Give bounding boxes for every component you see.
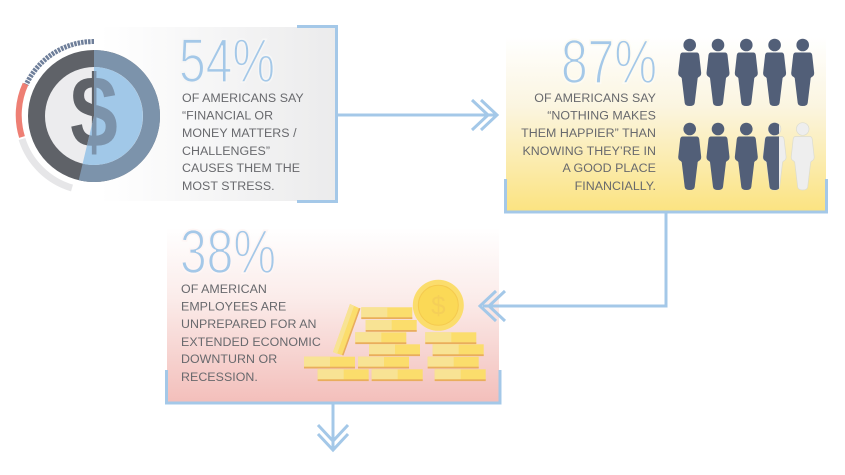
text: 87% description: FINANCIALLY. (575, 179, 656, 193)
text: 38% description: OF AMERICAN (181, 282, 267, 296)
stat: 38%: 38% (180, 218, 276, 287)
text: 87% description: KNOWING THEY’RE IN (522, 144, 656, 158)
arrow: down (318, 403, 348, 450)
text: 87% description: “NOTHING MAKES (547, 108, 656, 122)
bracket: bottom (166, 370, 500, 403)
text: 87% description: THEM HAPPIER” THAN (521, 126, 656, 140)
icon: dollar gauge (19, 41, 160, 188)
icon: dollar gauge: $ (70, 55, 118, 169)
text: 54% description: OF AMERICANS SAY (182, 91, 304, 105)
panel: 54% stress (19, 26, 336, 202)
text: 87% description: OF AMERICANS SAY (534, 91, 656, 105)
text: 54% description: “FINANCIAL OR (182, 108, 273, 122)
illustration: gold coin and bars (304, 280, 486, 381)
arrow: first to second (337, 100, 497, 130)
bracket: right (297, 26, 336, 202)
text: 38% description: DOWNTURN OR (181, 352, 277, 366)
panel: 87% happiness (506, 28, 826, 212)
icon: dollar gauge: $ (70, 55, 118, 169)
illustration: gold coin and bars: $ (431, 290, 446, 320)
stat: 87%: 87% (561, 28, 657, 97)
text: 54% description: MONEY MATTERS / (182, 126, 297, 140)
text: 54% description: MOST STRESS. (182, 179, 275, 193)
text: 38% description: EMPLOYEES ARE (181, 300, 286, 314)
stat: 54%: 54% (179, 27, 275, 96)
panel: 38% unprepared (166, 218, 500, 403)
text: 38% description: EXTENDED ECONOMIC (181, 335, 321, 349)
text: 54% description: CHALLENGES” (182, 144, 270, 158)
icon group: people 87 percent (678, 39, 814, 190)
text: 38% description: UNPREPARED FOR AN (181, 317, 317, 331)
arrow: second to third (480, 212, 666, 321)
text: 87% description: A GOOD PLACE (562, 161, 656, 175)
text: 54% description: CAUSES THEM THE (182, 161, 300, 175)
bracket: bottom (506, 179, 826, 212)
text: 38% description: RECESSION. (181, 370, 258, 384)
